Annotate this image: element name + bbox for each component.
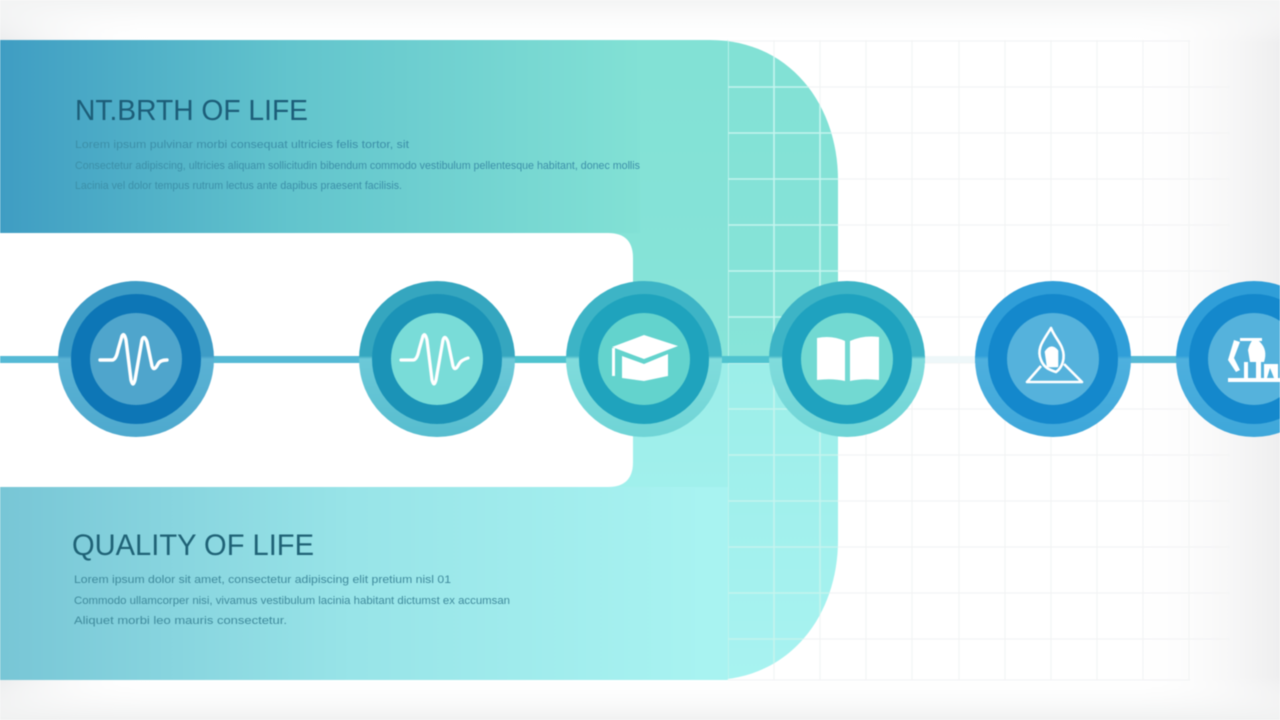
node: figures: [1176, 281, 1280, 437]
text block: top description: [75, 139, 640, 192]
text block: bottom description: Commodo ullamcorper nisi, vivamus vestibulum lacinia habitant dictumst ex accumsan: [74, 595, 510, 607]
icon: open book: [817, 336, 879, 381]
panel: white centre band: [0, 233, 633, 487]
node: flame figure: [975, 281, 1131, 437]
text block: top description: Consectetur adipiscing, ultricies aliquam sollicitudin bibendum commodo vestibulum pellentesque habitant, donec mollis: [75, 160, 640, 172]
icon: heartbeat: [401, 335, 468, 384]
node: heartbeat teal: [359, 281, 515, 437]
text block: top description: Lorem ipsum pulvinar morbi consequat ultricies felis tortor, sit: [75, 139, 409, 151]
icon: figures: [1228, 338, 1280, 382]
text block: bottom description: Aliquet morbi leo mauris consectetur.: [74, 615, 287, 627]
icon: flame figure: [1027, 328, 1082, 382]
heading: top: NT.BRTH OF LIFE: [75, 95, 308, 127]
heading: quality of life: QUALITY OF LIFE: [72, 529, 314, 562]
node: heartbeat blue: [58, 281, 214, 437]
icon: graduation cap: [612, 335, 678, 381]
overlay grid on backdrop: [728, 40, 840, 680]
panel: bottom band: [0, 487, 728, 680]
icon: heartbeat: [100, 335, 167, 384]
text block: top description: Lacinia vel dolor tempus rutrum lectus ante dapibus praesent facilisis.: [75, 180, 402, 192]
node: graduation cap: [566, 281, 722, 437]
timeline connector: [0, 356, 1280, 363]
text block: bottom description: Lorem ipsum dolor sit amet, consectetur adipiscing elit pretium nisl 01: [74, 574, 451, 586]
background grid: [728, 40, 1230, 680]
panel: curved backdrop: [0, 40, 838, 680]
node: open book: [769, 281, 925, 437]
text block: bottom description: [74, 574, 510, 627]
panel: top band: [0, 40, 640, 233]
